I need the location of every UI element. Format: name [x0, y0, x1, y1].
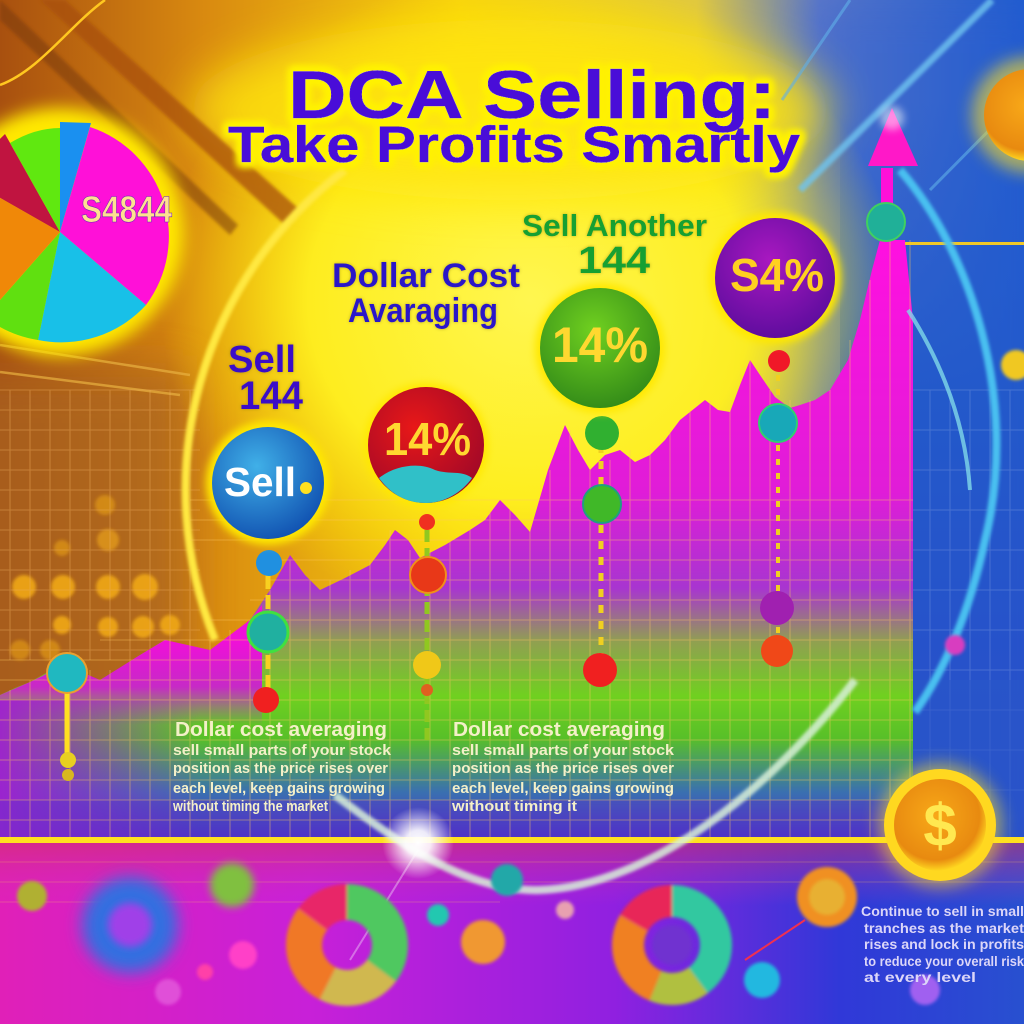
- label: sell 14%: [228, 339, 304, 418]
- label: sell 14%: 144: [239, 374, 304, 418]
- text block bottom right: tranches as the market: [864, 920, 1024, 936]
- text block bottom right: rises and lock in profits: [864, 936, 1024, 952]
- text block right: Dollar cost averaging: [453, 719, 665, 741]
- callout: purple S4%: [709, 212, 841, 344]
- donut chart right: [628, 901, 716, 989]
- text block right: each level, keep gains growing: [452, 780, 674, 797]
- label: dollar cost averaging: [332, 257, 520, 330]
- bokeh lights: [10, 495, 180, 660]
- callout: red 14%: [364, 383, 488, 507]
- text block right: without timing it: [451, 798, 577, 815]
- callout text: sell: Sell: [224, 459, 296, 505]
- label: dollar cost averaging: Dollar Cost: [332, 257, 520, 295]
- callout: green 14%: [535, 283, 665, 413]
- text block left: [172, 719, 392, 815]
- title: Take Profits Smartly: [228, 116, 801, 173]
- text block bottom right: Continue to sell in small: [861, 903, 1024, 919]
- big yellow arc: [186, 170, 345, 640]
- right grid: [913, 390, 1024, 840]
- coin: top right: [972, 57, 1024, 173]
- label: sell another: 144: [578, 240, 650, 282]
- title: [228, 57, 801, 173]
- label: sell another: [522, 208, 707, 282]
- small coin right: [1001, 350, 1024, 380]
- marker column 4: [583, 416, 621, 687]
- area chart: [0, 240, 1024, 840]
- magenta bubble right: [945, 635, 965, 655]
- text block right: [451, 719, 675, 815]
- text block right: position as the price rises over: [452, 760, 674, 777]
- bottom band: [0, 842, 1024, 1024]
- title: DCA Selling:: [288, 57, 776, 133]
- marker at arrow: [867, 203, 905, 241]
- text block bottom right: at every level: [864, 969, 976, 985]
- label: sell another: Sell Another: [522, 208, 707, 243]
- grid backdrop: [0, 390, 200, 660]
- callout text: purple S4%: S4%: [730, 249, 824, 301]
- text block bottom right: [861, 903, 1024, 985]
- callout: sell: [206, 421, 330, 545]
- pie label: S4844: [81, 189, 172, 230]
- text block left: position as the price rises over: [173, 760, 388, 777]
- callout text: red 14%: 14%: [384, 413, 471, 465]
- bottom bubbles: [17, 863, 940, 1005]
- marker column 5: [759, 350, 797, 667]
- pie chart: [0, 108, 184, 356]
- label: sell 14%: Sell: [228, 339, 296, 381]
- label: dollar cost averaging: Avaraging: [348, 292, 498, 330]
- callout text: green 14%: 14%: [552, 317, 648, 373]
- horizontal yellow lines: [0, 242, 1024, 843]
- donut chart left: [304, 902, 390, 988]
- text block left: Dollar cost averaging: [175, 719, 387, 741]
- text block left: sell small parts of your stock: [173, 742, 392, 759]
- lens flare: [350, 807, 454, 960]
- text block left: each level, keep gains growing: [173, 780, 385, 797]
- text block right: sell small parts of your stock: [452, 742, 675, 759]
- marker column 2: [248, 550, 288, 713]
- dollar sign: $: [923, 792, 957, 859]
- arrow tip of chart: [868, 106, 918, 225]
- marker column 3: [410, 514, 446, 745]
- marker 1 at chart start: [47, 653, 87, 781]
- cyan and white sweep arcs: [335, 170, 996, 890]
- text block left: without timing the market: [172, 798, 328, 815]
- chart grid: [0, 240, 1024, 880]
- coin: dollar: [878, 763, 1002, 887]
